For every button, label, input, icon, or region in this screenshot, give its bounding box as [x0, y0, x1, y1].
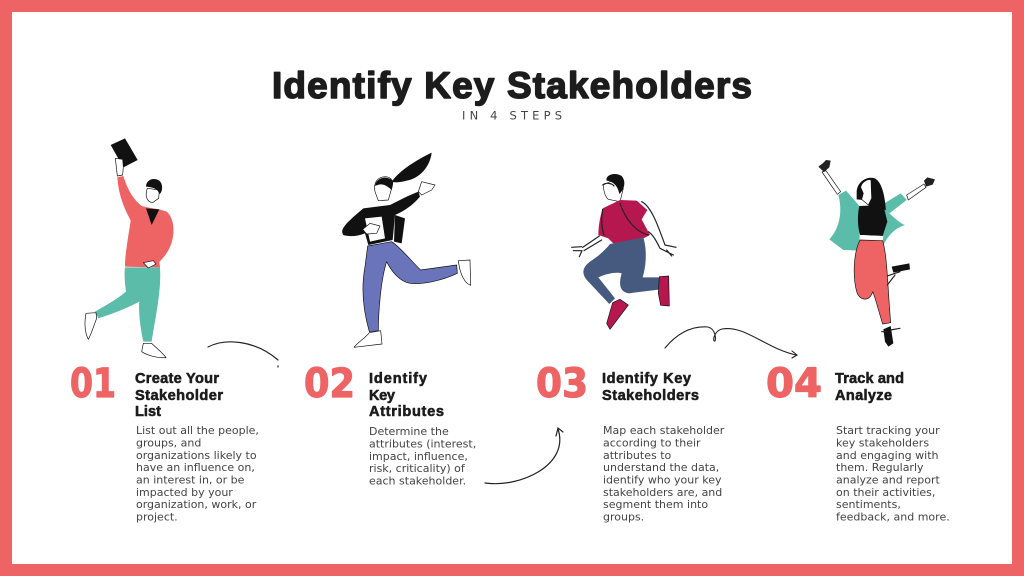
- step 1 body: have an influence on,: [136, 461, 255, 474]
- step 1 heading: Stakeholder: [135, 388, 223, 404]
- step 3: [536, 361, 725, 523]
- step 4 body: key stakeholders: [836, 436, 929, 449]
- subtitle: IN 4 STEPS: [462, 108, 562, 122]
- step 2 body: impact, influence,: [369, 450, 468, 463]
- step 2 heading: Identify: [369, 371, 428, 387]
- step 4 body: on their activities,: [836, 486, 935, 499]
- arrow: step 2 to step 3: [485, 428, 563, 484]
- step 1 body: an interest in, or be: [136, 474, 245, 486]
- step 4 body: analyze and report: [836, 474, 941, 486]
- step 2 body: risk, criticality) of: [369, 462, 466, 475]
- step 1 body: groups, and: [136, 436, 201, 449]
- number 01: 01: [70, 361, 116, 407]
- step 3 heading: Stakeholders: [602, 388, 699, 404]
- step 1 body: organizations likely to: [136, 449, 257, 462]
- step 2 heading: Attributes: [369, 404, 444, 420]
- step 2 body: Determine the: [369, 425, 449, 438]
- step 4 body: feedback, and more.: [836, 510, 950, 523]
- illustration: person with book: [85, 138, 173, 358]
- title: Identify Key Stakeholders: [272, 65, 752, 106]
- step 3 body: Map each stakeholder: [603, 424, 725, 437]
- step 4 heading: Analyze: [835, 388, 892, 404]
- step 1 body: project.: [136, 510, 178, 523]
- step 3 body: identify who your key: [603, 474, 722, 486]
- step 3 body: segment them into: [603, 498, 708, 511]
- step 4: [766, 361, 950, 523]
- step 2: [304, 361, 476, 488]
- number 03: 03: [536, 361, 588, 407]
- number 04: 04: [766, 361, 822, 407]
- step 1 heading: List: [135, 404, 161, 420]
- step 3 heading: Identify Key: [602, 371, 692, 387]
- step 4 body: and engaging with: [836, 449, 939, 462]
- step 3 body: stakeholders are, and: [603, 486, 722, 499]
- step 4 body: Start tracking your: [836, 424, 940, 437]
- step 3 body: groups.: [603, 510, 644, 523]
- step 1 heading: Create Your: [135, 371, 219, 387]
- step 2 body: attributes (interest,: [369, 437, 476, 450]
- step 1 body: organization, work, or: [136, 498, 257, 511]
- step 3 body: attributes to: [603, 449, 672, 462]
- arrow: step 1 to step 2: [208, 342, 278, 367]
- illustration: running woman with tablet: [342, 153, 471, 347]
- step 4 heading: Track and: [835, 371, 904, 387]
- step 3 body: understand the data,: [603, 461, 719, 474]
- step 2 heading: Key: [369, 388, 396, 404]
- step 1: [70, 361, 259, 523]
- step 4 body: them. Regularly: [836, 461, 924, 474]
- arrow: step 3 to step 4: [665, 327, 797, 358]
- step 1 body: List out all the people,: [136, 424, 259, 437]
- illustration: jumping man with glasses: [572, 174, 676, 329]
- number 02: 02: [304, 361, 355, 407]
- step 4 body: sentiments,: [836, 498, 901, 511]
- step 2 body: each stakeholder.: [369, 474, 466, 488]
- step 1 body: impacted by your: [136, 486, 233, 499]
- illustration: woman with arms raised: [818, 160, 935, 347]
- step 3 body: according to their: [603, 436, 701, 449]
